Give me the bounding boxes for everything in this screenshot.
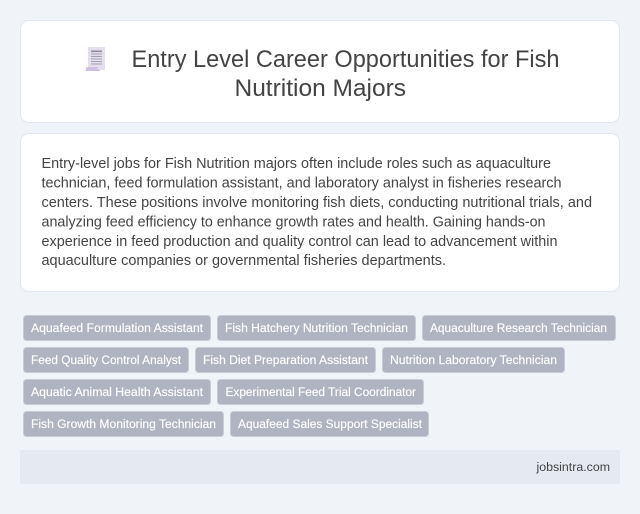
text block: description paragraph: Entry-level jobs for Fish Nutrition majors often include roles such as aquaculture (42, 156, 551, 172)
tag: Fish Hatchery Nutrition Technician (225, 321, 408, 335)
tag: Aquafeed Formulation Assistant (31, 321, 204, 335)
footer bar (20, 450, 620, 484)
tag (24, 348, 188, 372)
tag (230, 412, 428, 436)
tag: Nutrition Laboratory Technician (390, 353, 557, 367)
text block: description paragraph: experience in feed production and quality control can lead to advancement within (42, 234, 558, 250)
tag (24, 380, 210, 404)
panel: title card (20, 20, 620, 122)
text block: description paragraph: centers. These positions involve monitoring fish diets, conducting nutritional trials, and (42, 195, 592, 211)
panel: description (20, 134, 620, 292)
tag (196, 348, 376, 372)
tag: Fish Growth Monitoring Technician (31, 417, 216, 431)
tag (422, 316, 616, 340)
tag: Feed Quality Control Analyst (31, 353, 182, 367)
tag (24, 412, 224, 436)
text block: description paragraph: technician, feed formulation assistant, and laboratory analyst in fisheries research (42, 176, 562, 192)
icon: document scroll (86, 47, 105, 71)
title: Nutrition Majors (234, 75, 406, 102)
tag: Experimental Feed Trial Coordinator (226, 385, 416, 399)
tag: Aquafeed Sales Support Specialist (238, 417, 423, 431)
text block: description paragraph (42, 156, 592, 269)
tag (24, 316, 210, 340)
tag: Fish Diet Preparation Assistant (203, 353, 369, 367)
tag (218, 380, 424, 404)
tag (382, 348, 564, 372)
title: Entry Level Career Opportunities for Fish (132, 46, 560, 73)
tag: Aquaculture Research Technician (430, 321, 607, 335)
tag (218, 316, 416, 340)
text block: description paragraph: aquaculture companies or governmental fisheries departments. (42, 253, 446, 269)
footer source text: jobsintra.com (535, 460, 610, 474)
tag list (24, 316, 616, 436)
text block: description paragraph: analyzing feed efficiency to enhance growth rates and health. Gaining hands-on (42, 214, 546, 230)
tag: Aquatic Animal Health Assistant (31, 385, 204, 399)
title (132, 46, 560, 102)
